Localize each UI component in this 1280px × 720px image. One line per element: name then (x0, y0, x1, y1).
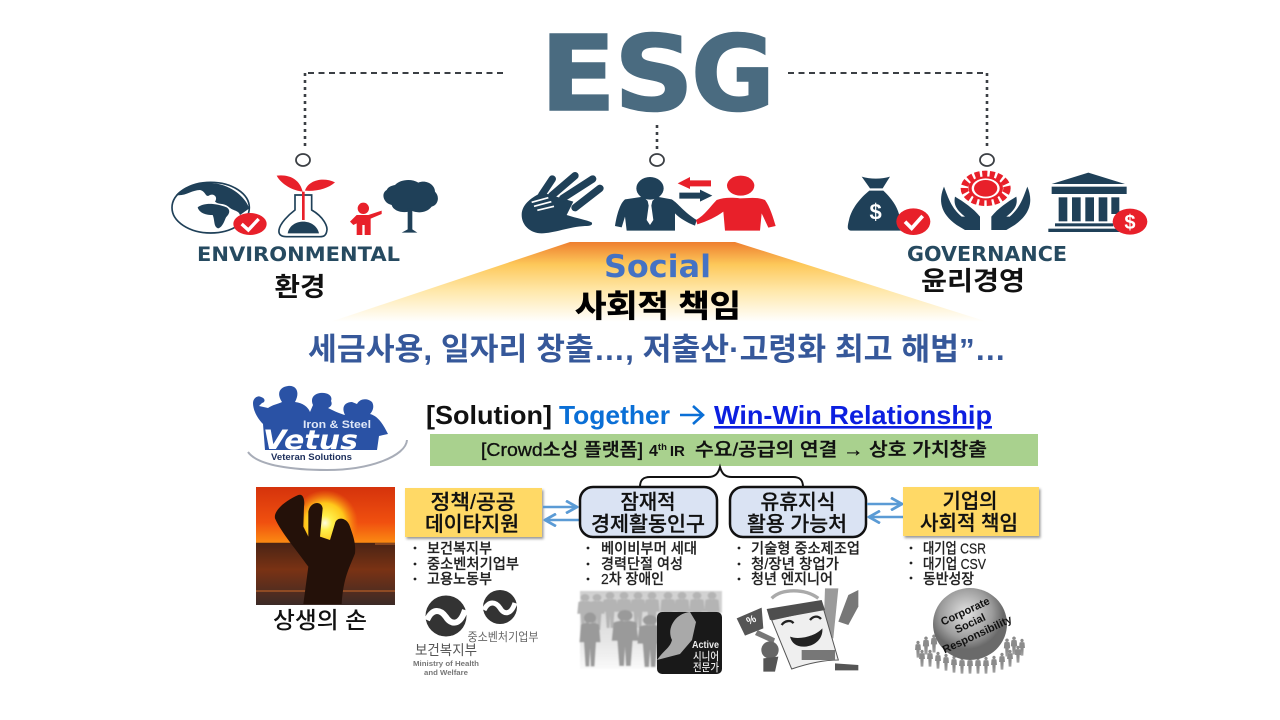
banner: crowd sourcing (430, 434, 1038, 466)
list: ministries: 고용노동부 (427, 571, 492, 588)
icon: exchange arrows (678, 177, 712, 202)
list: workforce: 경력단절 여성 (601, 556, 683, 573)
image: senior crowd: 시니어 (693, 650, 719, 663)
list: workforce: 베이비부머 세대 (601, 540, 697, 558)
icon: check badge (896, 208, 930, 235)
caption: 상생의 손: 상생의 손 (273, 607, 367, 633)
banner: crowd sourcing: th (658, 442, 667, 453)
heading: 사회적 책임: 사회적 책임 (575, 289, 741, 324)
box: potential workforce (580, 487, 717, 537)
logo: ministry of health: Ministry of Health (413, 659, 479, 668)
label: 환경: 환경 (274, 272, 326, 302)
label: 윤리경영: 윤리경영 (921, 266, 1025, 296)
icon: globe (172, 182, 249, 233)
list: ministries: 중소벤처기업부 (427, 556, 519, 573)
list: knowledge users (738, 540, 860, 588)
icon: flask with sprout (277, 175, 335, 237)
list: corporate: 동반성장 (923, 571, 974, 588)
list: workforce (587, 540, 697, 588)
icon: red person (696, 176, 776, 231)
banner: crowd sourcing: 4 (649, 443, 658, 460)
icon: child pointing (350, 203, 382, 235)
logo: ministry of SMEs: 중소벤처기업부 (468, 630, 538, 644)
list: knowledge users: 청년 엔지니어 (751, 571, 833, 588)
box: corporate responsibility: 사회적 책임 (920, 512, 1018, 535)
list: corporate: 대기업 CSR (923, 540, 986, 558)
icon group: governance (848, 173, 1147, 235)
logo: ministry of health (413, 596, 479, 677)
heading: solution (426, 400, 992, 430)
icon: dollar badge: $ (1124, 212, 1136, 234)
image: senior crowd: Active (692, 639, 719, 651)
box: potential workforce: 경제활동인구 (591, 513, 705, 536)
icon: check badge (233, 213, 267, 235)
icon: tree (383, 180, 438, 233)
banner: crowd sourcing: [Crowd소싱 플랫폼] (481, 440, 643, 460)
arrows: policy and population (543, 507, 579, 520)
list: knowledge users: 기술형 중소제조업 (751, 540, 860, 558)
logo: Iron & Steel: Iron & Steel (303, 419, 371, 431)
brace (640, 467, 803, 487)
title: ESG: G (691, 13, 775, 135)
icon group: environmental (172, 175, 438, 237)
image: cartoon of small business: % (745, 613, 759, 628)
subtitle: 세금사용, 일자리 창출…, 저출산·고령화 최고 해법”… (308, 332, 1006, 367)
box: policy data: 데이타지원 (425, 513, 519, 536)
arrow (680, 406, 703, 424)
list: ministries (414, 540, 519, 588)
heading: solution: Win-Win Relationship (714, 400, 992, 430)
icon: dollar badge (1113, 209, 1147, 235)
image: corporate social responsibility globe: Social (953, 612, 988, 636)
heading: solution: [Solution] (426, 400, 552, 430)
label: GOVERNANCE: GOVERNANCE (907, 242, 1067, 266)
trapezoid highlight: social (330, 242, 988, 322)
heading: Social: Social (604, 249, 711, 285)
title: ESG (540, 13, 775, 135)
box: corporate responsibility (903, 487, 1039, 536)
list: corporate (910, 540, 986, 588)
list: ministries: 보건복지부 (427, 540, 492, 558)
logo: Vetus wordmark: Vetus (263, 425, 358, 456)
logo silhouettes (253, 386, 388, 450)
photo: sunset hand (256, 487, 395, 605)
heading: solution: Together (559, 400, 670, 430)
logo: Veteran Solutions: Veteran Solutions (271, 452, 352, 462)
title: ESG: E (540, 13, 616, 135)
icon: money bag (848, 177, 903, 231)
box: idle knowledge: 활용 가능처 (747, 513, 847, 536)
icon group: social (522, 176, 776, 233)
box: policy data (405, 488, 542, 537)
logo: ministry of health: and Welfare (424, 668, 468, 677)
image: corporate social responsibility globe (915, 588, 1025, 674)
connector: ESG to Environmental (296, 73, 503, 166)
icon: hands with gear (941, 174, 1030, 230)
connector: ESG to Social (650, 125, 664, 166)
title: ESG: S (614, 13, 694, 135)
icon: hand (522, 176, 600, 233)
box: idle knowledge: 유휴지식 (760, 491, 836, 514)
icon: bank building (1048, 173, 1127, 232)
list: corporate: 대기업 CSV (923, 556, 986, 573)
banner: crowd sourcing: IR (670, 443, 685, 460)
box: potential workforce: 잠재적 (620, 491, 676, 514)
logo: Vetus (248, 386, 407, 470)
box: corporate responsibility: 기업의 (942, 490, 998, 513)
banner: crowd sourcing: 수요/공급의 연결 → 상호 가치창출 (695, 439, 987, 460)
image: senior crowd: 전문가 (693, 661, 719, 674)
connector: ESG to Governance (788, 73, 994, 166)
image: senior crowd (577, 591, 722, 674)
box: policy data: 정책/공공 (430, 491, 516, 514)
image: corporate social responsibility globe: Corporate (939, 595, 992, 628)
list: knowledge users: 청/장년 창업가 (751, 556, 839, 573)
icon: businessman (615, 177, 697, 231)
icon: money bag: $ (870, 199, 882, 224)
arrows: knowledge and corporate (867, 504, 903, 517)
logo: ministry of health: 보건복지부 (415, 642, 477, 658)
image: cartoon of small business (737, 588, 858, 672)
image: corporate social responsibility globe: Responsibility (941, 613, 1015, 656)
label: ENVIRONMENTAL: ENVIRONMENTAL (197, 243, 400, 266)
box: idle knowledge (730, 487, 866, 537)
logo: ministry of SMEs (468, 590, 538, 644)
list: workforce: 2차 장애인 (601, 571, 664, 588)
